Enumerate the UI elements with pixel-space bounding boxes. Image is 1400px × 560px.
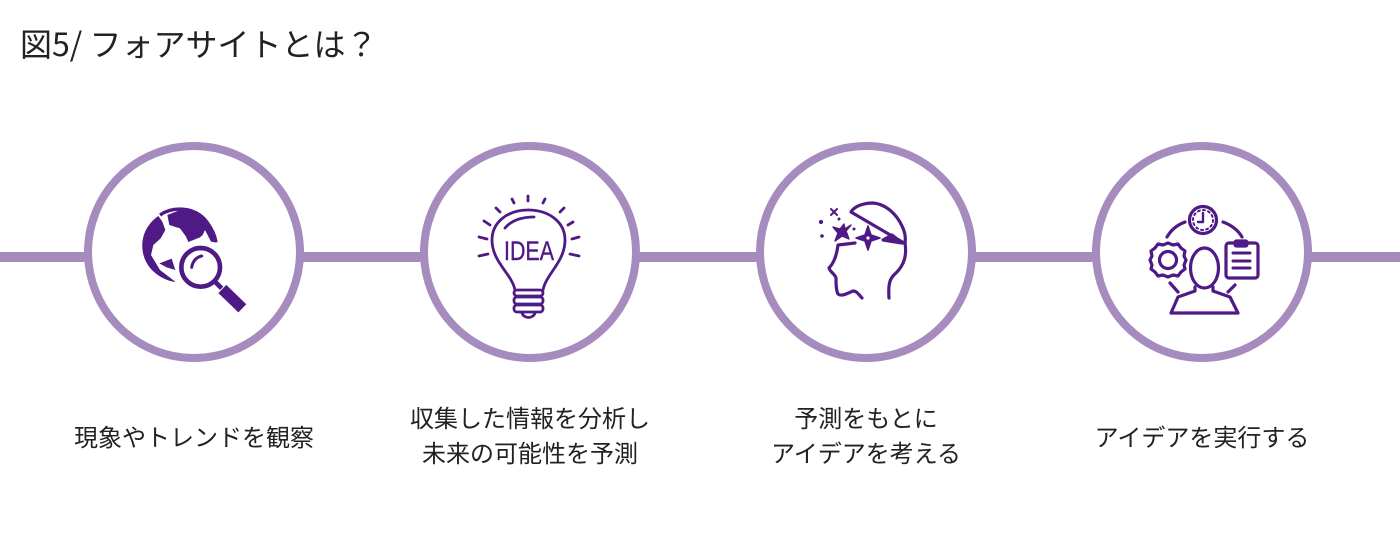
icon: person with clock, gear and clipboard [1150,206,1258,313]
icon: idea light bulb [479,196,579,318]
step 1 circle [88,146,300,358]
label: step 1: 現象やトレンドを観察 [74,418,314,453]
label: step 3: アイデアを考える [771,434,961,469]
icon text: IDEA: IDEA [504,236,554,266]
label: step 3: 予測をもとに [794,399,938,434]
label: step 2: 収集した情報を分析し [410,399,650,434]
timeline connector line [0,252,1400,262]
step 4 circle [1096,146,1308,358]
icon: head with open mind and stars [819,203,906,298]
icon: globe with magnifying glass [142,209,242,308]
step 2 circle [424,146,636,358]
label: step 4: アイデアを実行する [1095,418,1309,453]
label: step 2: 未来の可能性を予測 [422,434,638,469]
step 3 circle [760,146,972,358]
label: step 3 [771,399,961,469]
label: step 2 [410,399,650,469]
title: 図5/ フォアサイトとは？ [20,20,377,66]
